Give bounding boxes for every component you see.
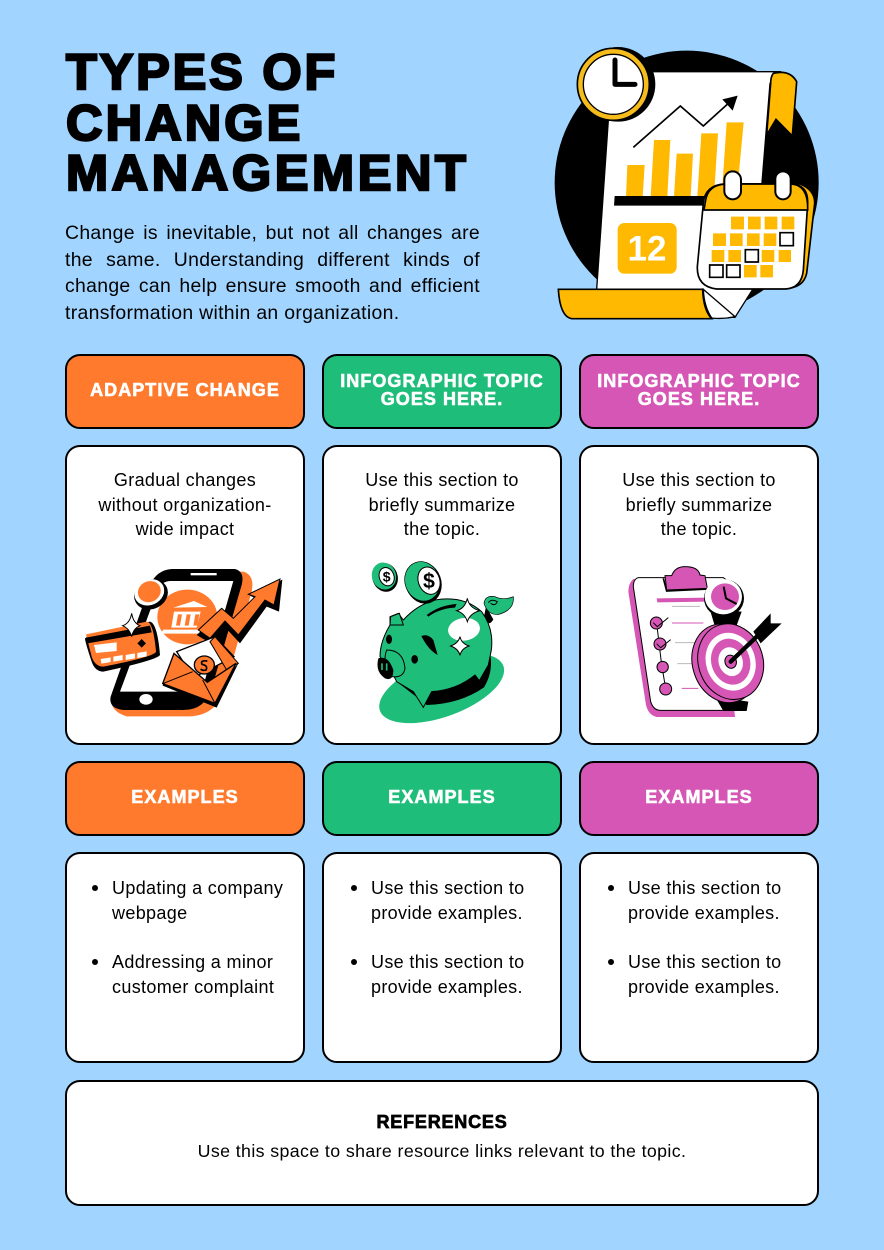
list item: Use this section to [371,952,525,972]
panel: second topic header: INFOGRAPHIC TOPIC [340,371,544,391]
title: MANAGEMENT [66,144,470,201]
panel: adaptive examples header [65,761,305,836]
summary text: without organization- [98,494,272,514]
list item: Use this section to [628,878,782,898]
panel: adaptive examples header: EXAMPLES [131,787,239,807]
list item: provide examples. [628,902,780,922]
list item: Updating a company [112,878,283,898]
icon: phone, bank, card and envelope [85,569,282,716]
intro text: the same. Understanding different kinds of [65,249,480,271]
list item [112,950,274,999]
panel: references [65,1080,819,1206]
panel: third topic header: GOES HERE. [638,389,760,409]
list item: provide examples. [371,976,523,996]
list item: webpage [112,902,187,922]
panel: adaptive change header [65,354,305,429]
summary text: Use this section to [365,470,519,490]
panel: second topic header [322,354,562,429]
icon: clipboard, clock and target [628,566,782,717]
title: CHANGE [66,94,303,150]
summary text: Use this section to [622,470,776,490]
list item: Addressing a minor [112,952,273,972]
summary text: briefly summarize [369,494,515,514]
panel: second topic header: GOES HERE. [381,389,503,409]
intro text: transformation within an organization. [65,302,399,324]
panel: third topic summary [579,445,819,745]
list item: provide examples. [371,902,523,922]
panel: adaptive change header: ADAPTIVE CHANGE [90,380,280,400]
title: TYPES OF [66,43,338,100]
icon: piggy bank with coins: $ [423,569,435,593]
panel: third examples header: EXAMPLES [645,787,753,807]
summary text [365,470,519,539]
list item: Use this section to [371,878,525,898]
label: 12: 12 [628,230,666,269]
icon: piggy bank with coins [372,561,514,724]
intro text [65,222,480,324]
summary text: wide impact [136,519,234,539]
panel: third examples header [579,761,819,836]
panel: second examples header [322,761,562,836]
panel: second examples list [322,852,562,1063]
panel: adaptive examples list [65,852,305,1063]
panel: third topic header: INFOGRAPHIC TOPIC [597,371,801,391]
list item: customer complaint [112,976,274,996]
list item [371,950,525,999]
summary text [622,470,776,539]
panel: third examples list [579,852,819,1063]
summary text: the topic. [404,519,480,539]
references text: Use this space to share resource links relevant to the topic. [198,1141,686,1161]
summary text [98,470,272,539]
panel: second topic summary [322,445,562,745]
references heading: REFERENCES [376,1112,508,1132]
panel: third topic header [579,354,819,429]
panel: second examples header: EXAMPLES [388,787,496,807]
summary text: Gradual changes [114,470,256,490]
illustration: report with chart, clock and calendar [554,47,819,320]
list item [628,876,782,925]
list item [112,876,283,925]
list item [628,950,782,999]
intro text: Change is inevitable, but not all changes are [65,222,480,244]
panel: adaptive change summary [65,445,305,745]
summary text: the topic. [661,519,737,539]
list item [371,876,525,925]
title [65,43,470,201]
list item: provide examples. [628,976,780,996]
intro text: change can help ensure smooth and efficient [65,275,480,297]
summary text: briefly summarize [626,494,772,514]
icon: piggy bank with coins: $ [383,568,391,584]
list item: Use this section to [628,952,782,972]
